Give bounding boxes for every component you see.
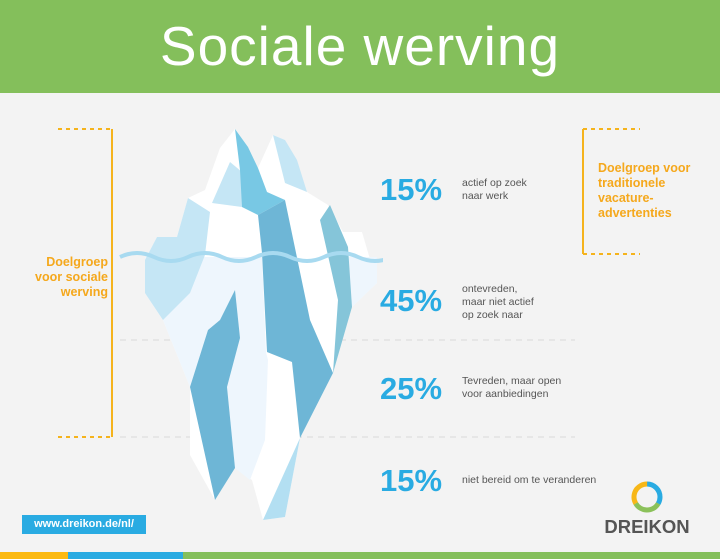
text: maar niet actief (462, 296, 534, 308)
stat: 45% unsatisfied (380, 283, 534, 321)
url badge (22, 515, 146, 534)
text: voor aanbiedingen (462, 388, 548, 400)
logo: DREIKON (604, 516, 690, 537)
title: Sociale werving (160, 15, 560, 77)
header bar (0, 0, 720, 93)
url badge: www.dreikon.de/nl/ (34, 518, 134, 530)
label: traditional target group: advertenties (598, 206, 672, 220)
label: traditional target group: vacature- (598, 191, 654, 205)
label: social target group: werving (61, 285, 108, 299)
stat: 15% active (380, 172, 527, 207)
bracket: left (58, 128, 113, 438)
stat: 15% unwilling (380, 463, 596, 498)
bracket: right (582, 128, 640, 255)
text: ontevreden, (462, 283, 517, 295)
label: social target group: voor sociale (35, 270, 108, 284)
stat: 25% satisfied (380, 371, 561, 406)
text: naar werk (462, 190, 508, 202)
label: traditional target group: Doelgroep voor (598, 161, 690, 175)
label: social target group: Doelgroep (46, 255, 108, 269)
wave line (119, 251, 383, 263)
text: 45% (380, 283, 442, 318)
logo (604, 482, 690, 537)
text: 15% (380, 172, 442, 207)
text: niet bereid om te veranderen (462, 474, 596, 486)
text: Tevreden, maar open (462, 375, 561, 387)
label: traditional target group (598, 161, 690, 220)
text: 15% (380, 463, 442, 498)
label: social target group (35, 255, 108, 299)
bottom stripe (0, 552, 720, 559)
text: op zoek naar (462, 309, 523, 321)
label: traditional target group: traditionele (598, 176, 665, 190)
text: 25% (380, 371, 442, 406)
text: actief op zoek (462, 177, 527, 189)
